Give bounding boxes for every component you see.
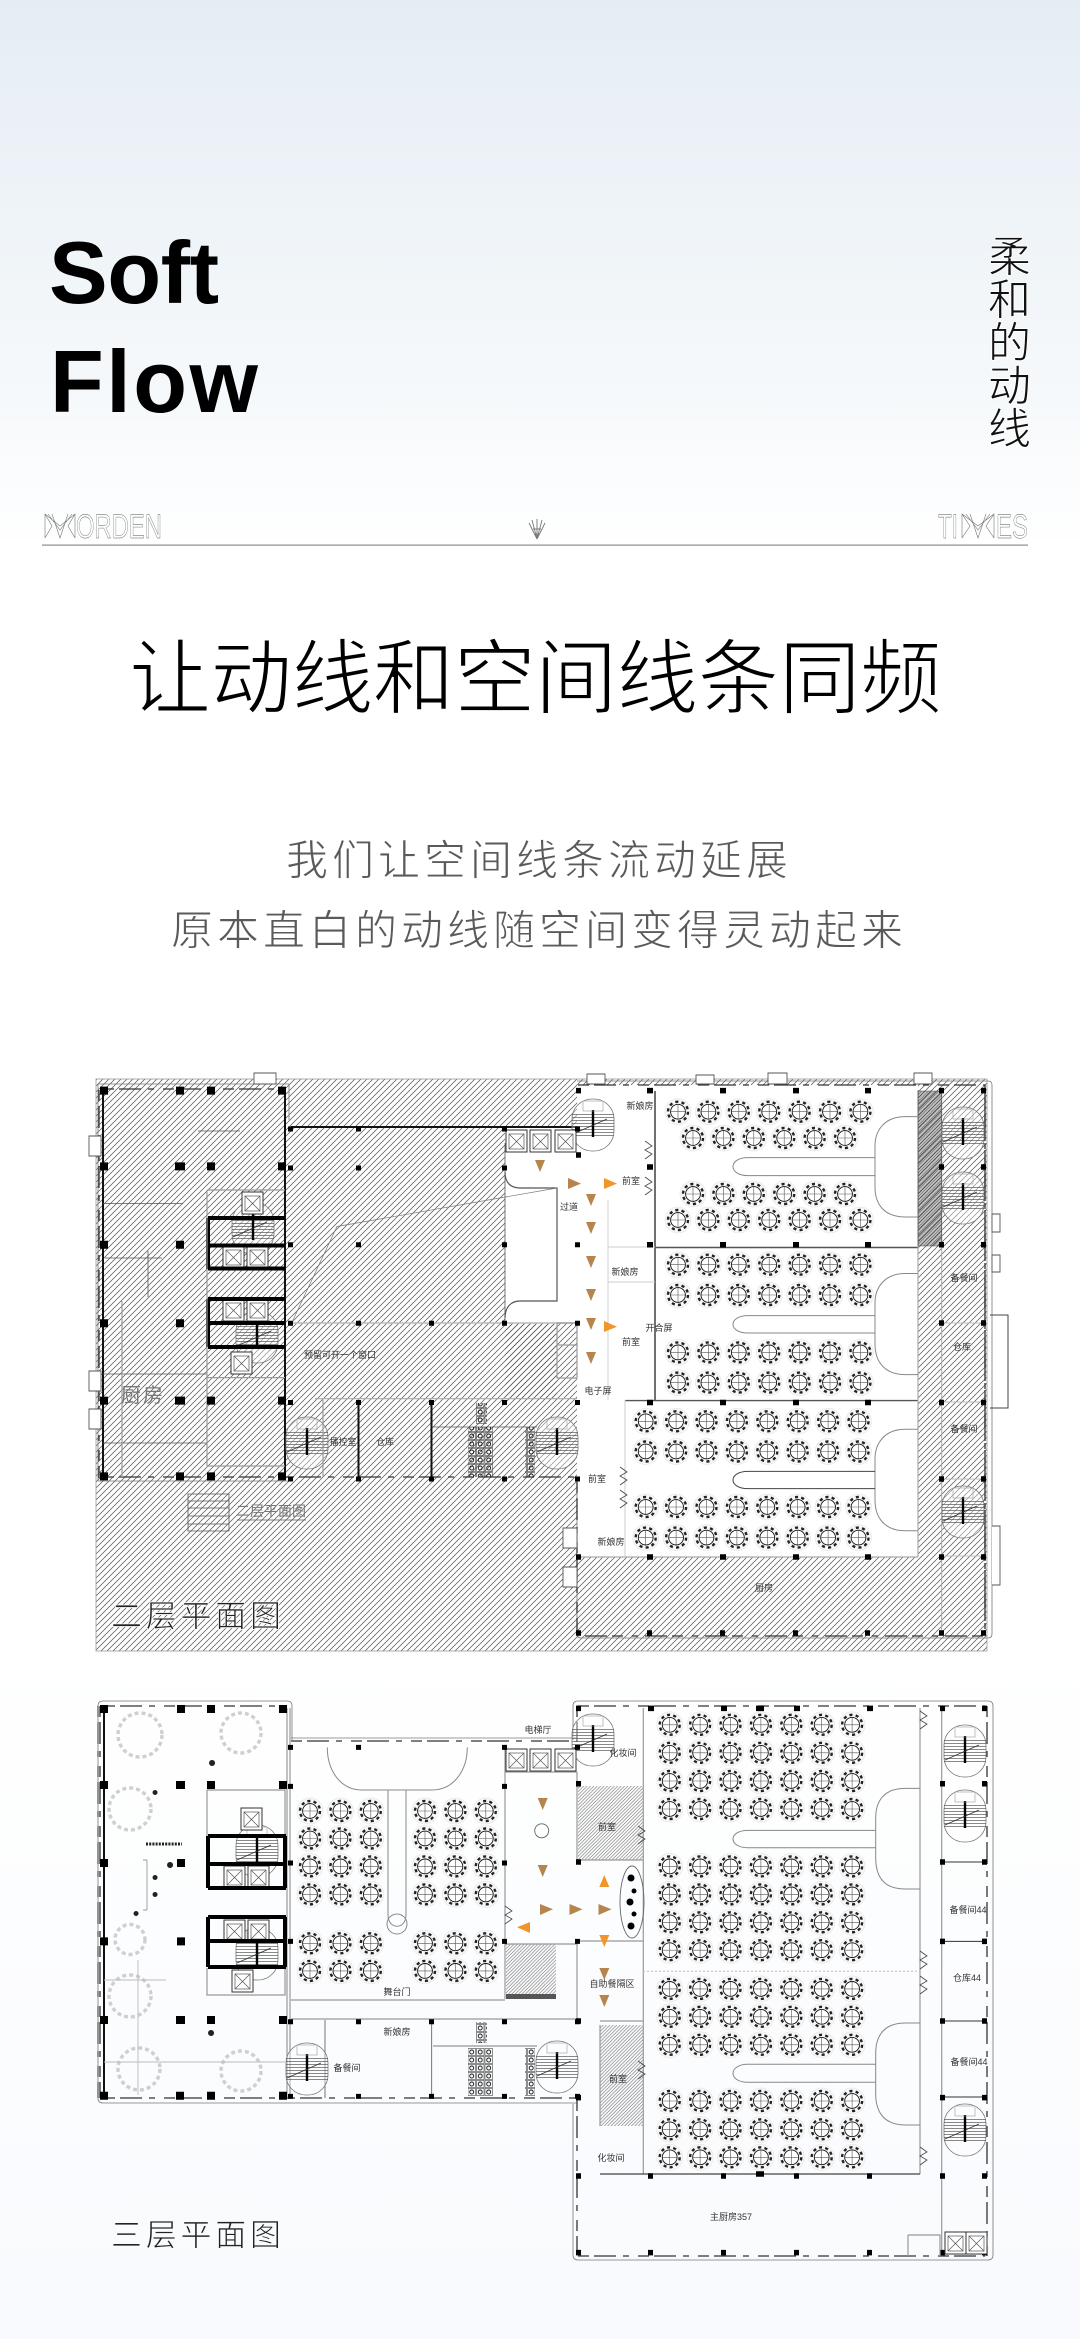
lift banks [223, 1130, 576, 1374]
title: Soft Flow: Flow [50, 332, 259, 431]
room labels: 前室 [622, 1175, 640, 1186]
room labels: 电子屏 [584, 1385, 612, 1396]
stairs [236, 1714, 986, 2156]
panel: second floor plan [89, 1073, 1008, 1651]
room labels: 备餐间44 [949, 1904, 987, 1915]
dense hatched rooms [506, 1786, 643, 2126]
room labels: 新娘房 [597, 1536, 625, 1547]
room labels: 备餐间 [950, 1423, 978, 1434]
room labels: 前室 [598, 1821, 616, 1832]
brand right: TIMES: TI [938, 508, 958, 546]
room labels: 化妆间 [597, 2152, 625, 2163]
room labels: 开合屏 [645, 1322, 673, 1333]
plan caption: third floor: 三层平面图 [111, 2218, 281, 2253]
intro text: 我们让空间线条流动延展 [286, 837, 788, 884]
core walls [208, 1836, 286, 1967]
title: Soft Flow: Soft [49, 223, 219, 322]
flow arrows: orange [517, 1875, 609, 1947]
stairs [232, 1099, 984, 1538]
feature planter [620, 1866, 644, 1938]
heading: 让动线和空间线条同频 [129, 634, 942, 725]
brand left: MORDEN: ORDEN [76, 508, 162, 546]
room labels: 前室 [622, 1336, 640, 1347]
panel: third floor plan [98, 1701, 993, 2260]
room labels: 仓库 [953, 1341, 971, 1352]
toilets [468, 1403, 535, 1477]
room labels: 主厨房357 [710, 2211, 752, 2222]
brand right: TIMES: ES [996, 508, 1028, 546]
room labels: 新娘房 [383, 2026, 411, 2037]
flow arrows: orange [604, 1178, 617, 1332]
VIP round tables [109, 1713, 261, 2091]
hall walls [577, 1090, 985, 1634]
room labels: 备餐间44 [950, 2056, 988, 2067]
room labels: 电梯厅 [524, 1724, 552, 1735]
room labels: 新娘房 [611, 1266, 639, 1277]
room labels: 舞台门 [383, 1986, 411, 1997]
vertical title: 柔和的动线: 和 [988, 277, 1031, 325]
lift banks [224, 1749, 576, 1992]
intro text [171, 837, 903, 954]
room labels: 前室 [609, 2073, 627, 2084]
stages and runways [327, 1747, 920, 2125]
title: Soft Flow [49, 223, 259, 431]
room labels: 播控室 [329, 1436, 357, 1447]
structural columns [100, 1091, 986, 1633]
lobby notch wall [505, 1172, 557, 1318]
VIP hall partitions and fittings [104, 1760, 285, 2095]
vertical title: 柔和的动线: 的 [988, 320, 1031, 368]
kitchen label: 厨房 [121, 1384, 165, 1407]
room labels: 自助餐隔区 [589, 1978, 635, 1989]
core walls [208, 1218, 285, 1347]
outer walls [98, 1701, 993, 2260]
small plan title: 二层平面图 [236, 1503, 306, 1519]
room labels: 预留可开一个窗口 [304, 1349, 376, 1360]
flow arrows: brown [535, 1160, 596, 1364]
plan caption: second floor: 二层平面图 [111, 1599, 281, 1634]
vertical title: 柔和的动线: 线 [988, 406, 1031, 454]
room labels: 厨房 [755, 1582, 773, 1593]
room labels: 化妆间 [609, 1747, 637, 1758]
icon: fan [529, 519, 545, 539]
hall doors [620, 1141, 652, 1508]
room labels: 备餐间 [950, 1272, 978, 1283]
white public zones [505, 1085, 918, 1557]
room labels [304, 1100, 978, 1593]
stages and runways [733, 1117, 918, 1531]
banquet tables [297, 1711, 866, 2171]
thin partition lines [103, 1131, 577, 1531]
brand row: MORDEN fan TIMES [42, 508, 1028, 546]
vertical title: 柔和的动线: 动 [988, 363, 1031, 411]
room labels: 新娘房 [626, 1100, 654, 1111]
room labels: 仓库 [376, 1436, 394, 1447]
flow arrows: brown [538, 1798, 612, 2007]
brand right: TIMES [938, 508, 1028, 546]
room labels: 备餐间 [333, 2062, 361, 2073]
hall walls [207, 1708, 985, 2255]
vertical title: 柔和的动线: 柔 [988, 234, 1031, 282]
outer walls [89, 1073, 1008, 1638]
structural columns [100, 1708, 987, 2253]
hall doors [505, 1711, 927, 2165]
room labels: 过道 [560, 1201, 578, 1212]
hatched site [96, 1079, 987, 1651]
room labels: 前室 [588, 1473, 606, 1484]
room labels [333, 1724, 988, 2222]
brand rule [42, 544, 1028, 546]
brand left: MORDEN [45, 508, 162, 546]
banquet tables [632, 1098, 874, 1551]
room labels: 仓库44 [953, 1972, 981, 1983]
lift bank south east [908, 2232, 987, 2256]
toilets [468, 2022, 535, 2096]
lobby round planter [535, 1824, 549, 1838]
intro text: 原本直白的动线随空间变得灵动起来 [171, 907, 903, 954]
dense hatched service band [918, 1091, 942, 1246]
